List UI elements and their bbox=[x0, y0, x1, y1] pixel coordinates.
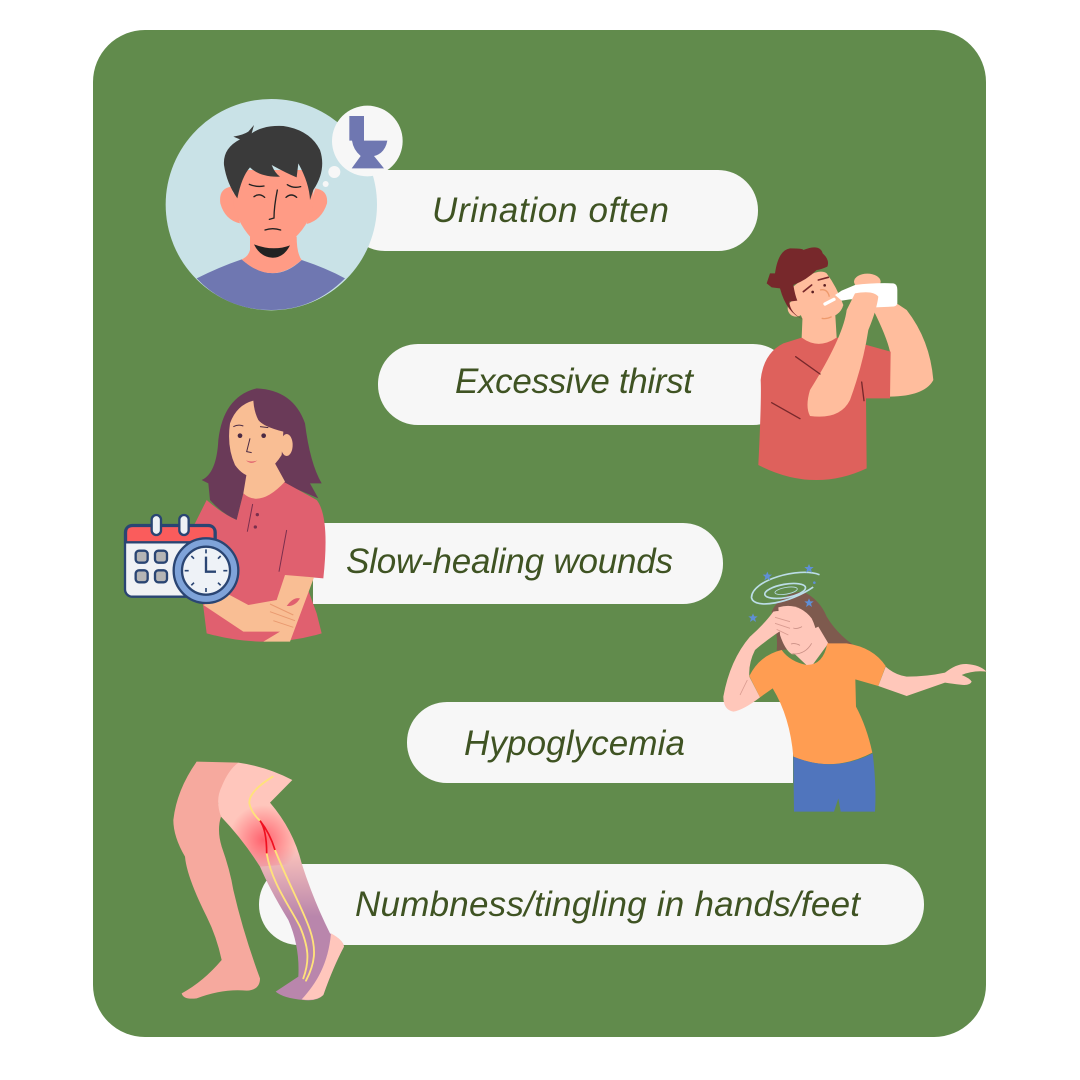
hair bbox=[772, 592, 853, 651]
face details bbox=[791, 627, 812, 654]
pill: Hypoglycemia: Hypoglycemia bbox=[464, 724, 685, 763]
neck bbox=[242, 237, 302, 273]
hair bbox=[767, 247, 828, 319]
thought bubbles bbox=[328, 166, 340, 178]
face bbox=[229, 401, 283, 477]
pill: Slow-healing wounds bbox=[313, 523, 723, 604]
finger lines bbox=[740, 617, 790, 695]
illustration: man drinking from bottle bbox=[758, 247, 933, 480]
front leg bbox=[218, 763, 344, 1000]
chin shadow bbox=[254, 244, 290, 258]
rear arm bbox=[873, 290, 933, 397]
shirt bbox=[197, 259, 345, 310]
shirt bbox=[193, 482, 326, 642]
ears bbox=[220, 187, 327, 224]
pill: Urination often: Urination often bbox=[432, 191, 669, 230]
face bbox=[233, 170, 313, 248]
t-shirt bbox=[749, 643, 886, 764]
icon: clock bbox=[174, 538, 238, 603]
pill: Slow-healing wounds: Slow-healing wounds bbox=[346, 542, 673, 581]
pill: Hypoglycemia bbox=[407, 702, 793, 783]
fingers bbox=[270, 604, 295, 627]
bottle hand top bbox=[854, 274, 881, 290]
shirt placket bbox=[247, 504, 287, 572]
illustration: legs with nerve pain bbox=[173, 762, 344, 1000]
neck bbox=[243, 463, 285, 499]
arms bbox=[203, 575, 314, 642]
pill: Numbness/tingling in hands/feet: Numbness/tingling in hands/feet bbox=[355, 885, 861, 924]
pill: Numbness/tingling in hands/feet bbox=[259, 864, 924, 945]
icon: calendar bbox=[125, 515, 216, 597]
icon: toilet bbox=[349, 116, 387, 168]
facial features bbox=[803, 277, 828, 292]
bottle bbox=[835, 283, 897, 307]
facial features bbox=[249, 184, 301, 230]
neck bbox=[783, 627, 828, 668]
pill: Excessive thirst: Excessive thirst bbox=[455, 362, 694, 401]
illustration: dizzy woman bbox=[723, 564, 987, 812]
heel bbox=[302, 933, 344, 1000]
t-shirt bbox=[758, 338, 891, 480]
ear bbox=[788, 300, 804, 317]
back leg bbox=[173, 762, 260, 999]
wound bbox=[287, 598, 300, 606]
face bbox=[793, 272, 843, 319]
shirt fold lines bbox=[772, 357, 864, 419]
facial features bbox=[238, 433, 242, 438]
arm on forehead bbox=[723, 611, 791, 712]
nerves bbox=[249, 777, 314, 981]
front arm bbox=[807, 292, 878, 417]
hair bbox=[224, 125, 322, 200]
dizzy rings bbox=[749, 569, 823, 607]
inflammation glow bbox=[218, 763, 302, 867]
trousers bbox=[793, 753, 875, 812]
pill: Urination often bbox=[345, 170, 758, 251]
illustration: man thinking of toilet bbox=[166, 99, 403, 310]
ear bbox=[281, 434, 293, 456]
face bbox=[778, 606, 818, 654]
outstretched arm bbox=[878, 664, 987, 696]
pill: Excessive thirst bbox=[378, 344, 793, 425]
neck bbox=[802, 310, 837, 344]
green background panel bbox=[93, 30, 986, 1037]
stars bbox=[748, 564, 816, 622]
hair back bbox=[202, 388, 322, 520]
illustration: woman with wound, calendar and clock bbox=[125, 388, 326, 642]
